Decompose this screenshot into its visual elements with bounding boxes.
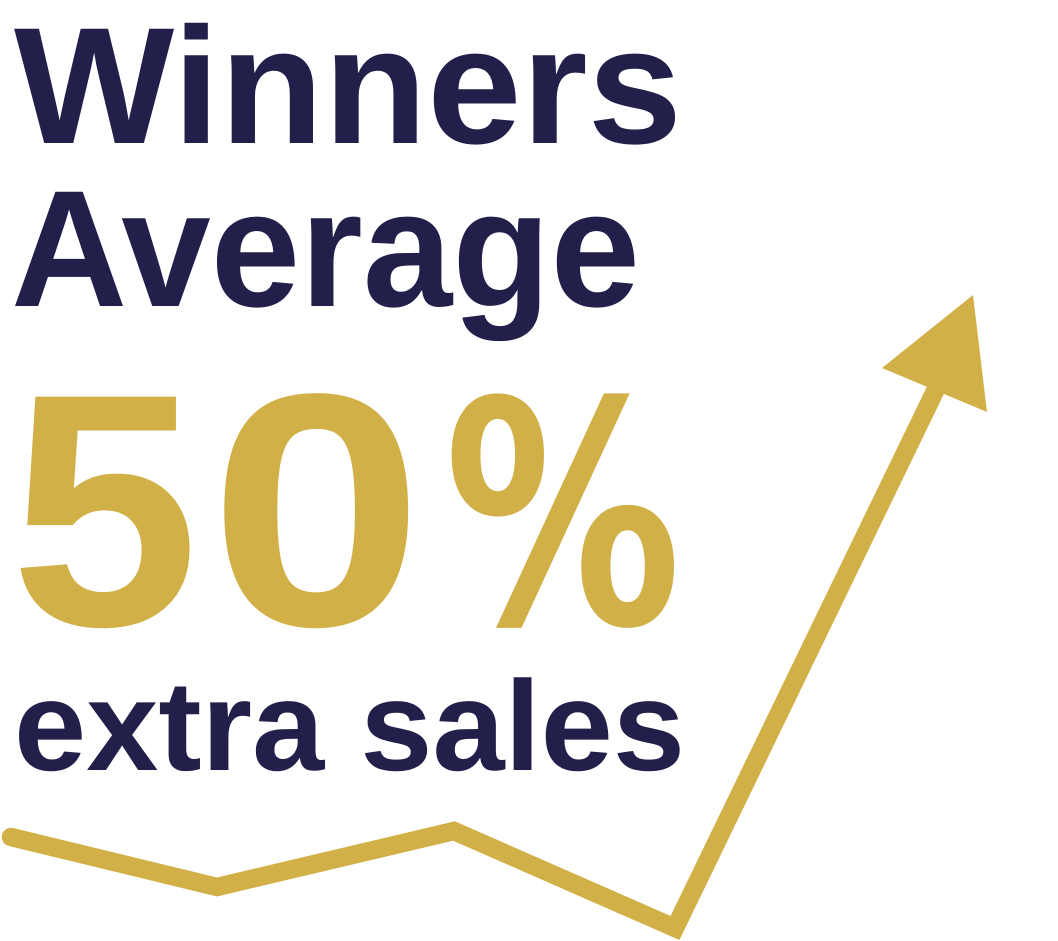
subtitle: extra sales: extra sales	[14, 655, 685, 798]
big number: 50%	[10, 325, 682, 698]
big number: 50%: 5	[10, 325, 199, 696]
big number: 50%: %	[444, 336, 682, 698]
arrow: rising sales line	[11, 295, 987, 928]
title line: Average: Average	[11, 157, 640, 342]
big number: 50%: 0	[209, 325, 424, 696]
